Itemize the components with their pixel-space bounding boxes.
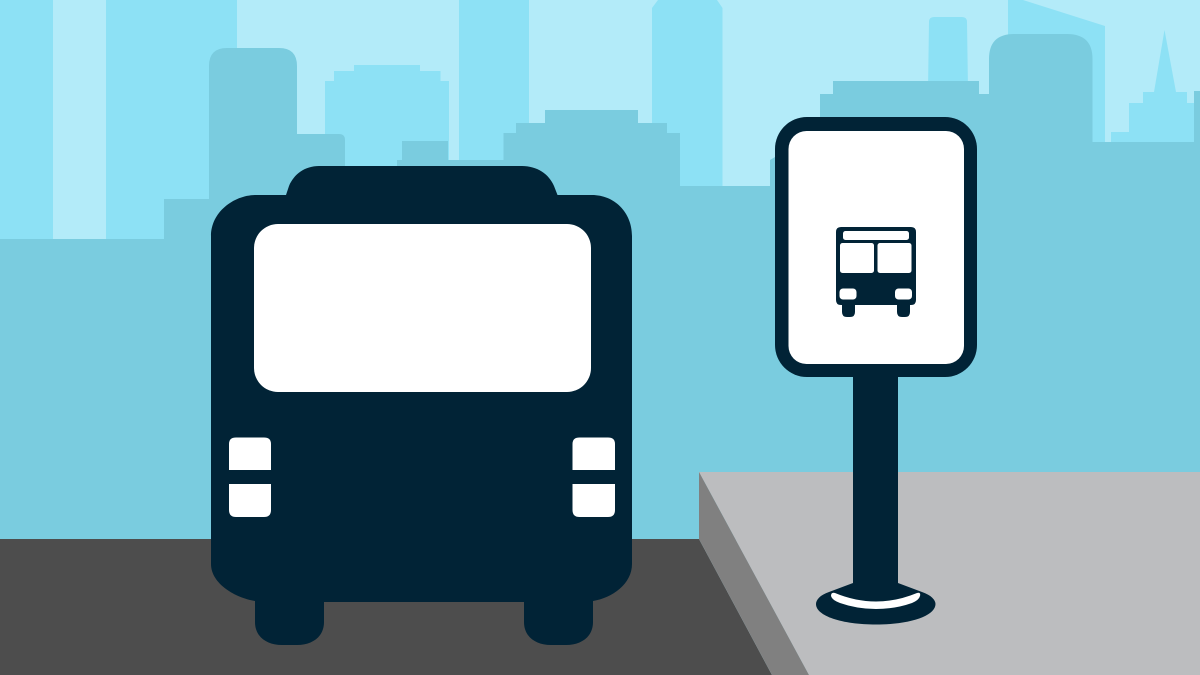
icon bus body — [836, 227, 916, 317]
bus stop sign — [775, 117, 977, 624]
right upper headlight — [572, 438, 615, 470]
sidewalk top surface — [699, 472, 1200, 675]
sign base — [816, 583, 936, 624]
sign pole — [853, 370, 898, 586]
road — [0, 539, 772, 675]
right lower headlight — [572, 484, 615, 517]
left upper headlight — [229, 438, 271, 470]
bus body — [211, 166, 632, 645]
sidewalk curb face — [699, 472, 809, 675]
icon left headlight — [840, 288, 856, 300]
icon destination sign — [843, 231, 909, 240]
sign panel frame — [775, 117, 977, 377]
base highlight — [831, 593, 920, 609]
left lower headlight — [229, 484, 271, 517]
icon left window — [840, 243, 874, 273]
icon: bus — [836, 227, 916, 317]
bus front — [211, 166, 632, 645]
near skyline buildings — [0, 34, 1200, 540]
sign panel face — [788, 131, 964, 364]
far skyline buildings — [0, 0, 1200, 240]
icon right headlight — [895, 288, 912, 300]
bus windshield — [254, 224, 591, 392]
icon right window — [878, 243, 912, 273]
